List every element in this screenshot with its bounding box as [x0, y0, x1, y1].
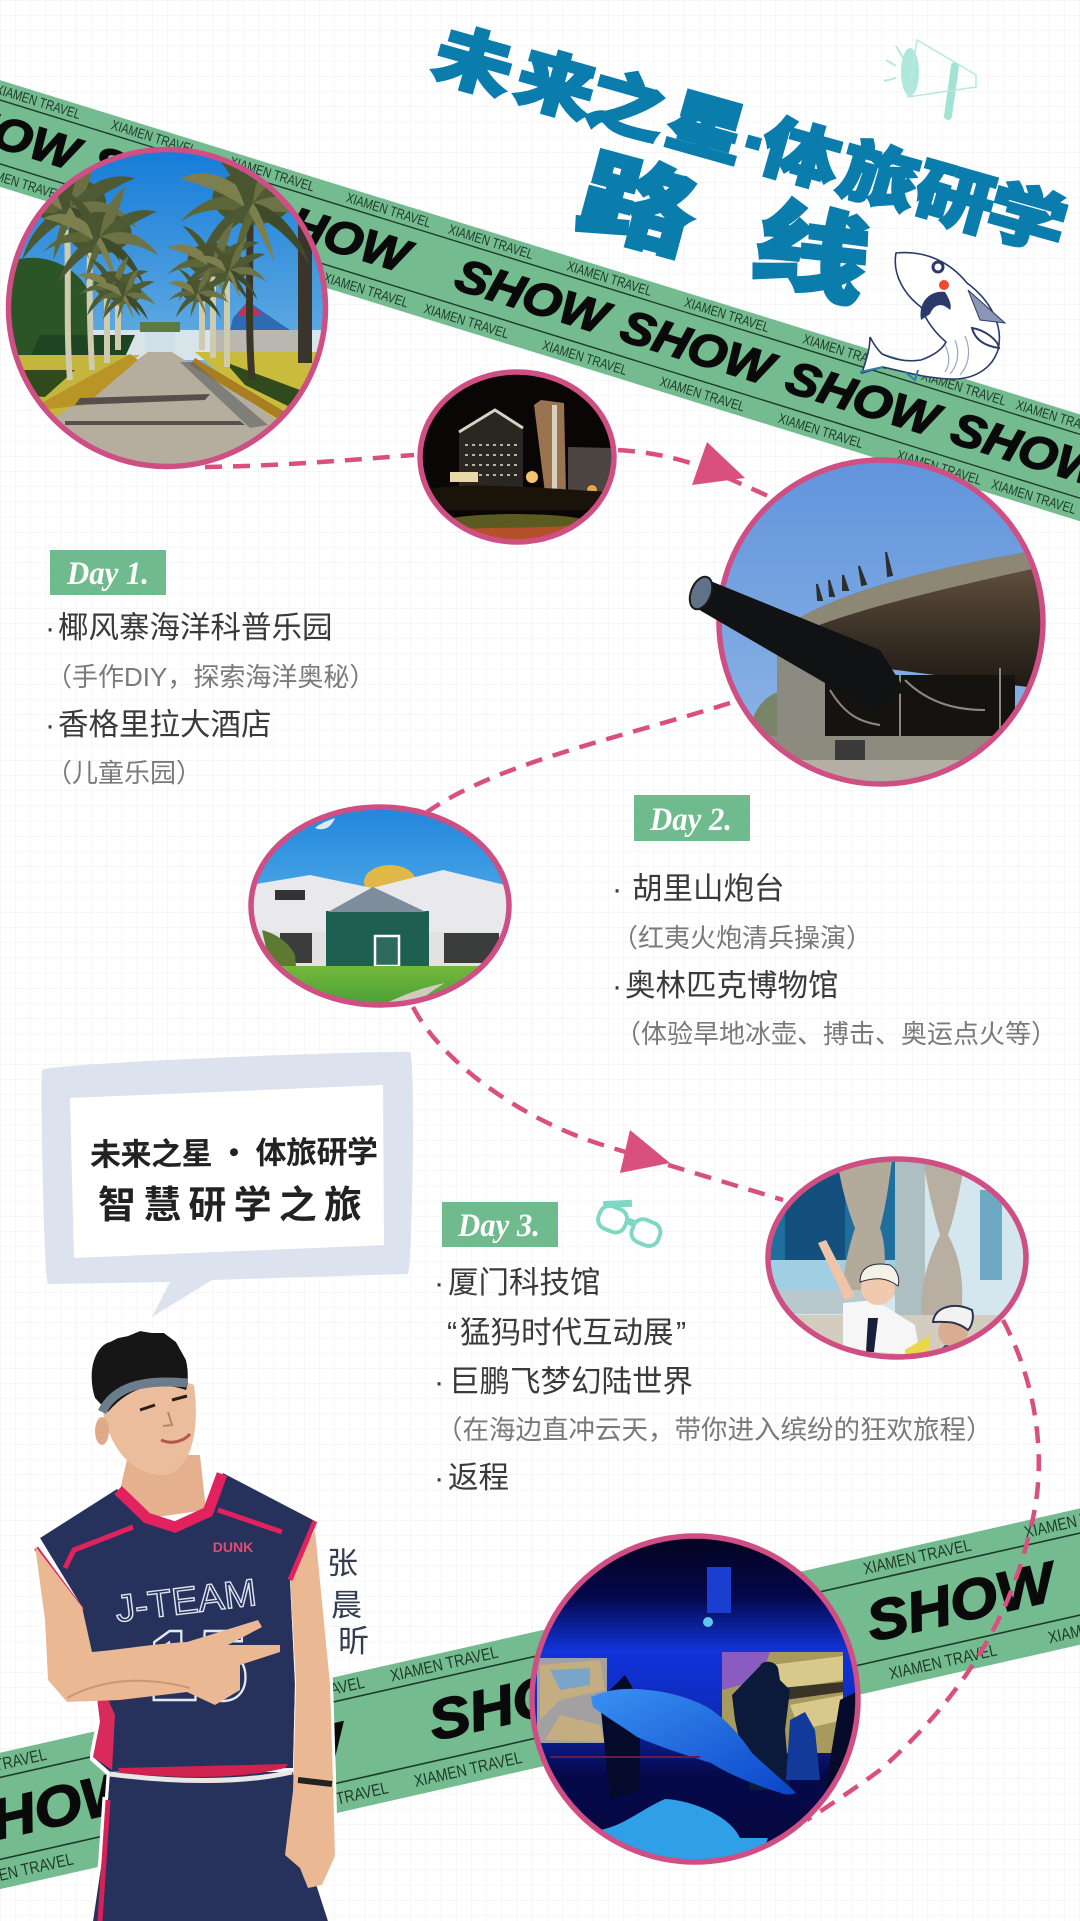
jersey lettering: J-TEAM: [113, 1572, 259, 1631]
title: 未来之星·体旅研学: [426, 17, 1074, 266]
title: 路: [568, 141, 707, 273]
text: Day 1 list: 椰风寨海洋科普乐园: [58, 611, 332, 645]
photo: hotel at night: [417, 369, 617, 545]
top ribbon: SHOW / XIAMEN TRAVEL: XIAMEN TRAVEL: [422, 300, 511, 342]
tag: Day 1: [50, 550, 166, 595]
cannon barrel: [688, 576, 901, 694]
text: Day 1 list: ·: [45, 708, 55, 742]
bottom ribbon: SHOW / XIAMEN TRAVEL: SHOW: [861, 1549, 1064, 1653]
top ribbon: SHOW / XIAMEN TRAVEL: SHOW: [780, 350, 948, 447]
top ribbon: SHOW / XIAMEN TRAVEL: XIAMEN TRAVEL: [541, 337, 629, 378]
bottom ribbon: SHOW / XIAMEN TRAVEL: XIAMEN TRAVEL: [862, 1536, 973, 1578]
arrow 1: [692, 442, 745, 485]
top ribbon: SHOW / XIAMEN TRAVEL: XIAMEN TRAVEL: [109, 116, 198, 158]
route: dashed path 2: [427, 703, 730, 812]
watch: [298, 1780, 332, 1784]
bottom ribbon: SHOW / XIAMEN TRAVEL: SHOW: [423, 1648, 626, 1752]
text: Day 1 list: ·: [45, 611, 55, 645]
top ribbon: SHOW / XIAMEN TRAVEL: XIAMEN TRAVEL: [919, 367, 1008, 409]
text: Day 2 list: 奥林匹克博物馆: [625, 969, 838, 1003]
bottom ribbon: SHOW / XIAMEN TRAVEL: [0, 1469, 1080, 1908]
text: Day 3 list: 厦门科技馆: [448, 1266, 600, 1300]
top ribbon: SHOW / XIAMEN TRAVEL: SHOW: [450, 248, 618, 345]
face: [101, 1381, 196, 1475]
top ribbon: SHOW / XIAMEN TRAVEL: XIAMEN TRAVEL: [658, 373, 747, 415]
text: Day 2 list: ·: [612, 969, 622, 1003]
text: Day 3 list: ·: [434, 1266, 444, 1300]
text: name: 晨: [331, 1588, 362, 1623]
photo: palm avenue: [6, 146, 328, 470]
top ribbon: SHOW / XIAMEN TRAVEL: XIAMEN TRAVEL: [776, 410, 865, 451]
bottom ribbon: SHOW / XIAMEN TRAVEL: XIAMEN TRAVEL: [388, 1643, 500, 1685]
text: name: 昕: [338, 1624, 369, 1659]
text: Day 2 list: （红夷火炮清兵操演）: [612, 923, 872, 953]
text: Day 1 list: （儿童乐园）: [46, 758, 202, 788]
text: Day 2 list: （体验旱地冰壶、搏击、奥运点火等）: [615, 1019, 1057, 1049]
text: Day 3 list: 巨鹏飞梦幻陆世界: [449, 1365, 693, 1399]
text: Day 2 list: ·: [612, 872, 622, 906]
callout: speech bubble: 智慧研学之旅: [98, 1174, 362, 1229]
person: basketball player: [35, 1331, 335, 1921]
photo: aquarium with whale: [525, 1528, 870, 1870]
text: Day 1 list: （手作DIY，探索海洋奥秘）: [46, 662, 375, 692]
neck: [120, 1455, 206, 1518]
icon: glasses: [595, 1193, 667, 1249]
top ribbon: SHOW / XIAMEN TRAVEL: XIAMEN TRAVEL: [344, 189, 433, 231]
top ribbon: SHOW / XIAMEN TRAVEL: XIAMEN TRAVEL: [683, 294, 772, 335]
top ribbon: SHOW / XIAMEN TRAVEL: XIAMEN TRAVEL: [565, 258, 654, 299]
person: basketball player: DUNK: [213, 1539, 253, 1555]
shorts: [93, 1772, 328, 1921]
top ribbon: SHOW / XIAMEN TRAVEL: XIAMEN TRAVEL: [447, 221, 536, 262]
text: name: 张: [327, 1546, 358, 1581]
top ribbon: SHOW / XIAMEN TRAVEL: SHOW: [86, 135, 254, 232]
person: basketball player: 15: [148, 1610, 248, 1722]
text: Day 2 list: 胡里山炮台: [632, 872, 784, 906]
bottom ribbon: SHOW / XIAMEN TRAVEL: SHOW: [151, 1710, 354, 1814]
tag: Day 3: Day 3.: [457, 1208, 540, 1244]
top ribbon: SHOW / XIAMEN TRAVEL: SHOW: [251, 187, 419, 284]
callout: speech bubble: [41, 1052, 413, 1317]
text: Day 3 list: ·: [434, 1461, 444, 1495]
title: 线: [742, 188, 881, 320]
text: Day 3 list: 返程: [448, 1461, 509, 1495]
bottom ribbon: SHOW / XIAMEN TRAVEL: XIAMEN TRAVEL: [255, 1673, 366, 1716]
text: name: [327, 1546, 369, 1659]
callout: speech bubble: 未来之星 • 体旅研学: [90, 1126, 378, 1175]
jersey: [40, 1473, 315, 1772]
text: Day 3 list: [434, 1266, 992, 1495]
tag: Day 1: Day 1.: [66, 556, 149, 592]
tag: Day 2: [634, 795, 750, 841]
text: Day 3 list: ·: [434, 1365, 444, 1399]
text: Day 1 list: [45, 611, 375, 788]
left arm and hand: [35, 1546, 280, 1705]
route: dashed path 3: [413, 1007, 783, 1200]
right arm: [285, 1530, 335, 1888]
top ribbon: SHOW / XIAMEN TRAVEL: XIAMEN TRAVEL: [322, 269, 411, 310]
bottom ribbon: SHOW / XIAMEN TRAVEL: XIAMEN TRAVEL: [412, 1748, 524, 1791]
icon: shark: [860, 253, 1005, 380]
text: Day 2 list: [612, 872, 1057, 1049]
top ribbon: SHOW / XIAMEN TRAVEL: SHOW: [615, 299, 783, 396]
top ribbon: SHOW / XIAMEN TRAVEL: XIAMEN TRAVEL: [895, 447, 984, 488]
photo: children at science museum: [765, 1156, 1029, 1360]
text: Day 3 list: ”: [676, 1316, 686, 1350]
text: Day 3 list: 猛犸时代互动展: [460, 1316, 674, 1350]
text: Day 3 list: “: [447, 1316, 457, 1350]
top ribbon: SHOW / XIAMEN TRAVEL: [0, 55, 1080, 567]
route: dashed path 4: [807, 1320, 1039, 1820]
route: dashed path 1: [205, 450, 768, 496]
arrow 2: [620, 1130, 670, 1173]
tag: Day 2: Day 2.: [649, 802, 732, 838]
photo: Hulishan cannon fort: [685, 450, 1055, 795]
top ribbon: SHOW / XIAMEN TRAVEL: XIAMEN TRAVEL: [801, 331, 890, 372]
icon: megaphone: [884, 40, 976, 116]
tag: Day 3: [442, 1202, 558, 1247]
bottom ribbon: SHOW / XIAMEN TRAVEL: XIAMEN TRAVEL: [887, 1641, 999, 1683]
text: Day 1 list: 香格里拉大酒店: [58, 708, 272, 742]
top ribbon: SHOW / XIAMEN TRAVEL: XIAMEN TRAVEL: [228, 153, 317, 195]
photo: Olympic museum: [245, 800, 515, 1016]
bottom ribbon: SHOW / XIAMEN TRAVEL: XIAMEN TRAVEL: [279, 1778, 390, 1821]
text: Day 3 list: （在海边直冲云天，带你进入缤纷的狂欢旅程）: [436, 1415, 992, 1445]
